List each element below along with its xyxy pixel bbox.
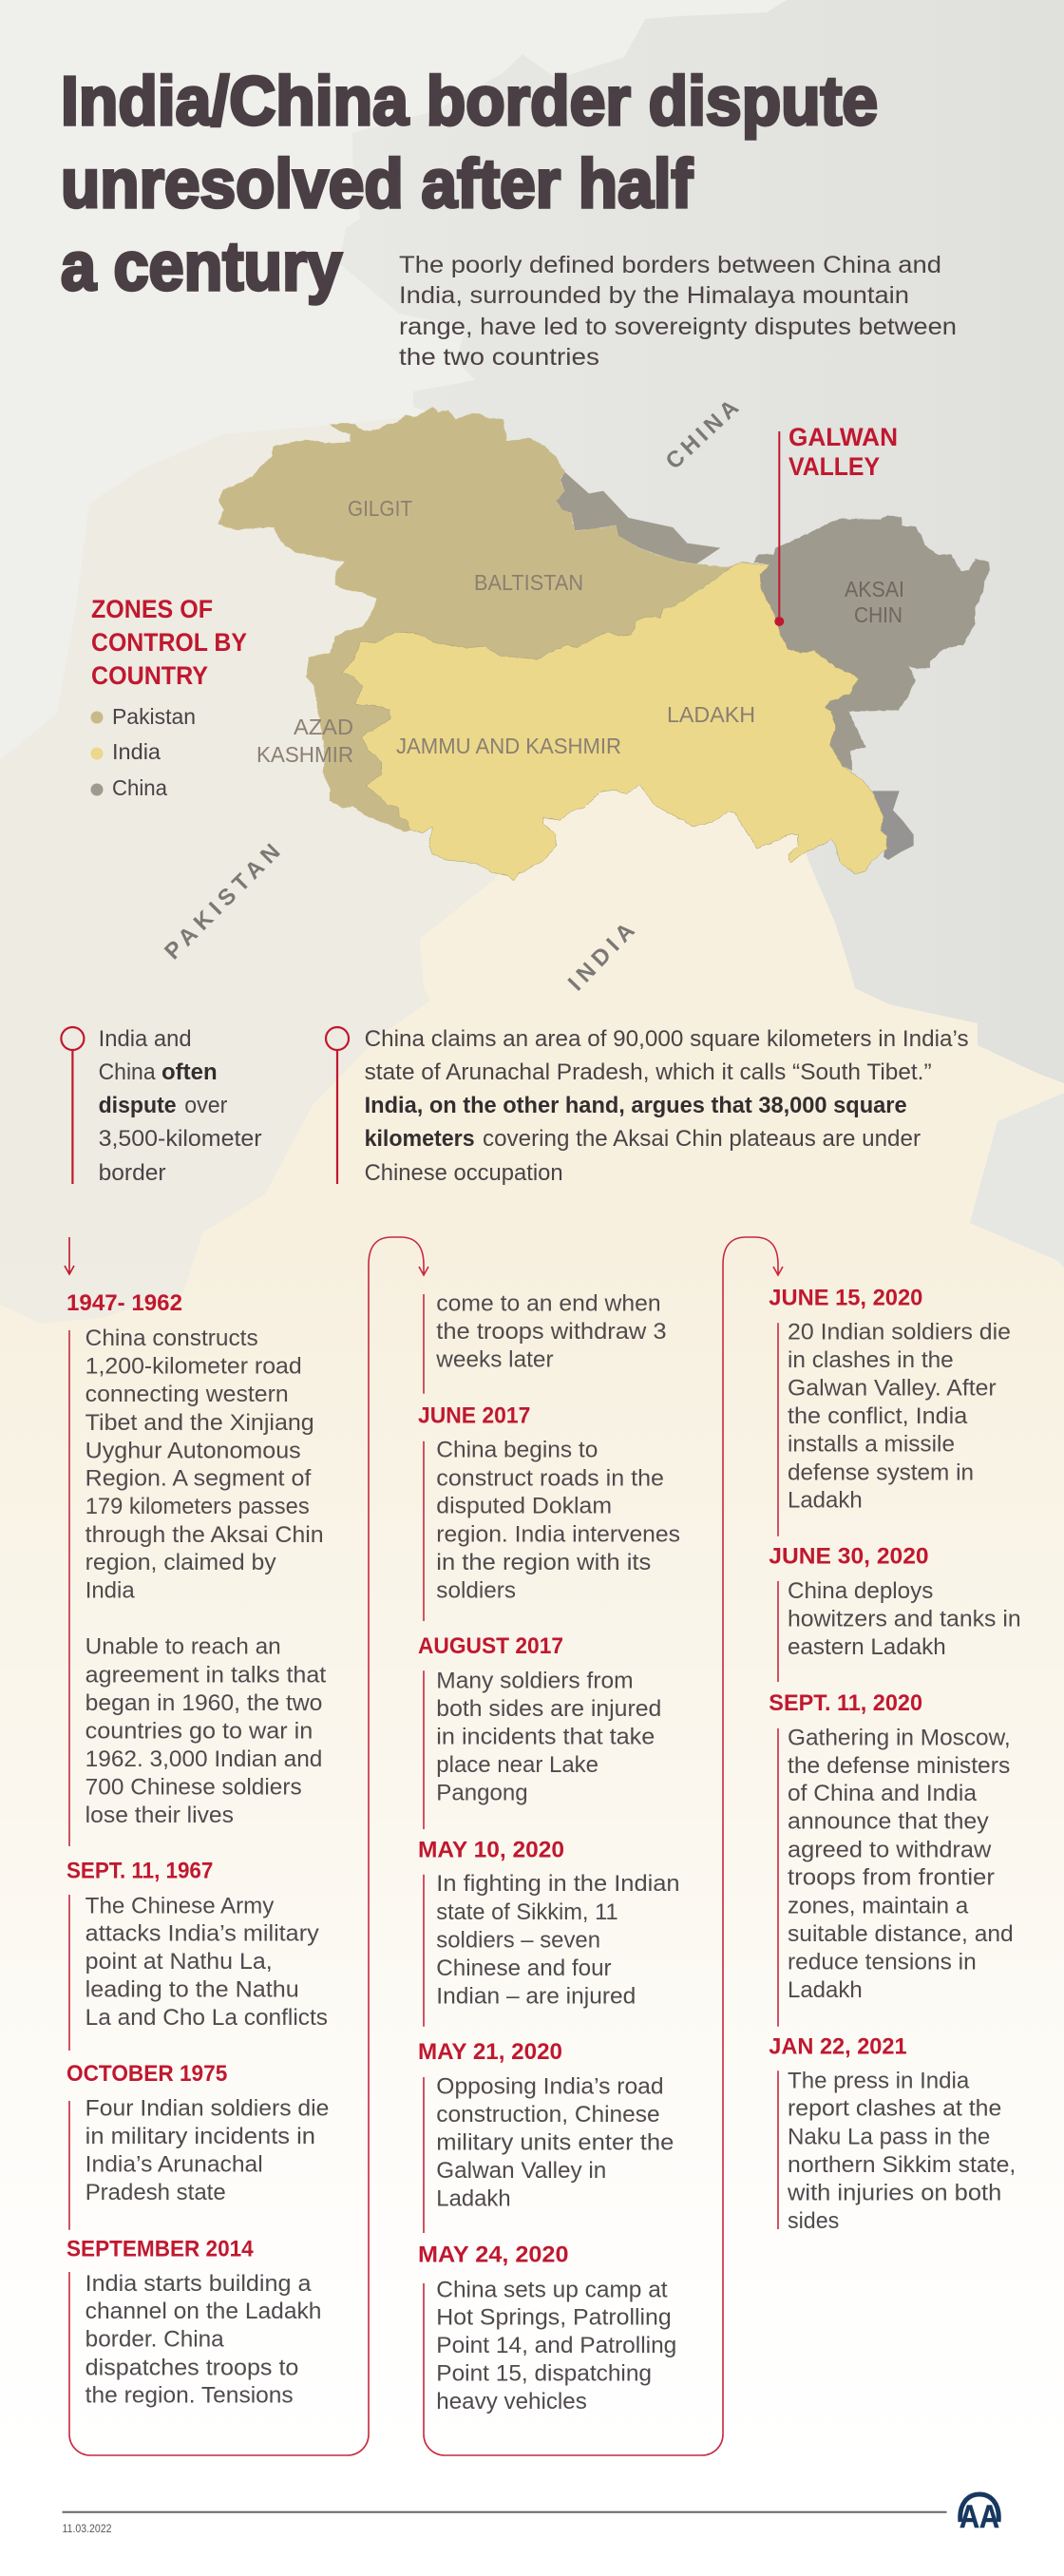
entry text: Ladakh [788,1488,863,1514]
legend heading [91,595,247,690]
entry text: channel on the Ladakh [86,2299,321,2324]
entry text: the conflict, India [788,1403,968,1429]
entry text: 1962. 3,000 Indian and [86,1746,322,1772]
entry text: China deploys [788,1578,933,1604]
entry text: defense system in [788,1460,974,1485]
timeline entry: June 15, 2020 [769,1285,1011,1536]
entry text: Region. A segment of [86,1466,312,1492]
icon: Anadolu Agency logo: AA [960,2499,999,2535]
country label: Pakistan: PAKISTAN [160,839,285,964]
country label: China: CHINA [661,395,744,474]
fact block: 3,500-kilometer border: often [162,1059,218,1085]
date heading: MAY 21, 2020 [418,2039,562,2065]
entry text: connecting western [86,1382,289,1407]
entry text: Pangong [436,1780,528,1805]
legend item: India [91,739,161,764]
entry text: Uyghur Autonomous [86,1438,301,1463]
timeline entry: 1947-1962 [66,1290,327,1846]
title: unresolved after half [61,146,694,222]
entry text: La and Cho La conflicts [86,2005,328,2031]
entry text [436,1438,680,1603]
entry text [788,1725,1014,2003]
fact block: 3,500-kilometer border: border [99,1160,166,1186]
timeline entry: June 30, 2020 [769,1544,1021,1682]
entry text: state of Sikkim, 11 [436,1899,618,1925]
legend: zones of control by country [91,595,247,800]
entry text: India starts building a [86,2271,312,2297]
map label: Gilgit: GILGIT [348,496,412,521]
entry text: Point 14, and Patrolling [436,2333,676,2358]
entry text: 20 Indian soldiers die [788,1319,1011,1345]
callout: Galwan Valley marker [774,423,898,626]
callout: Galwan Valley marker: GALWAN [788,423,898,451]
intro text: the two countries [399,344,599,371]
date stamp: 11.03.2022 [63,2522,112,2535]
title [61,64,878,305]
timeline entry: May 10, 2020 [418,1837,680,2027]
entry text: point at Nathu La, [86,1949,273,1975]
entry text [436,2277,676,2414]
entry text: region, claimed by [86,1550,276,1575]
entry text: weeks later [435,1346,554,1372]
entry text: region. India intervenes [436,1521,680,1547]
entry text: of China and India [788,1781,978,1806]
entry text: through the Aksai Chin [86,1522,324,1548]
entry text: Opposing India’s road [436,2073,664,2099]
entry text: both sides are injured [436,1696,661,1722]
entry text: soldiers [436,1577,516,1603]
entry text: agreement in talks that [86,1662,327,1688]
entry text: border. China [86,2327,224,2353]
map label: Aksai Chin: CHIN [854,602,902,627]
title: a century [61,229,342,305]
country label: India: INDIA [563,918,639,996]
entry text: dispatches troops to [86,2355,298,2380]
title: India/China border dispute [61,64,878,140]
fact block: territorial claims: covering the Aksai Chin plateaus are under [483,1126,921,1152]
entry text: Naku La pass in the [788,2124,990,2149]
map label: Baltistan: BALTISTAN [474,570,583,595]
timeline entry: September 2014 [66,2236,321,2409]
entry text: reduce tensions in [788,1949,977,1975]
timeline entry: Jan 22, 2021 [769,2033,1016,2234]
entry text [86,1326,327,1828]
entry text: suitable distance, and [788,1921,1014,1947]
entry text: heavy vehicles [436,2389,587,2414]
fact block: territorial claims [326,1026,969,1186]
map label: Ladakh: LADAKH [667,702,755,727]
entry text: Tibet and the Xinjiang [86,1410,314,1436]
date heading: AUGUST 2017 [418,1633,563,1659]
entry text: Ladakh [788,1977,863,2003]
legend heading: ZONES OF [91,595,213,623]
entry text: in incidents that take [436,1725,655,1750]
entry text: China sets up camp at [436,2277,668,2302]
entry text [86,2271,321,2409]
entry text: lose their lives [86,1803,234,1828]
map label: Azad Kashmir [256,715,353,767]
entry text: leading to the Nathu [86,1977,299,2003]
entry text: the defense ministers [788,1753,1010,1779]
date heading: JUNE 15, 2020 [769,1285,922,1310]
entry text: come to an end when [436,1290,661,1316]
intro text: range, have led to sovereignty disputes between [399,314,957,340]
date heading: SEPT. 11, 1967 [66,1859,213,1884]
map of disputed zones [160,395,991,996]
fact block: territorial claims: Chinese occupation [365,1160,563,1186]
fact block: territorial claims: state of Arunachal Pradesh, which it calls “South Tibet.” [365,1059,932,1085]
entry text: the troops withdraw 3 [436,1319,667,1345]
timeline entry: May 21, 2020 [418,2039,674,2233]
entry text [788,1319,1011,1514]
entry text: The Chinese Army [86,1893,274,1918]
fact block: 3,500-kilometer border: India and [99,1026,192,1052]
entry text: Unable to reach an [86,1634,281,1660]
entry text: Four Indian soldiers die [86,2096,329,2122]
zone: Pakistan [218,407,741,832]
date heading: 1947- 1962 [66,1290,182,1316]
entry text: in the region with its [436,1550,651,1575]
entry text: place near Lake [436,1752,598,1778]
entry text: installs a missile [788,1432,955,1458]
date heading: SEPT. 11, 2020 [769,1690,922,1716]
entry text: attacks India’s military [86,1921,319,1947]
date heading: JUNE 30, 2020 [769,1544,929,1570]
entry text [787,2068,1016,2234]
entry text: 1,200-kilometer road [86,1354,302,1380]
timeline entry: Sept. 11, 1967 [66,1859,328,2051]
timeline entry: September 2014 continued [424,1290,667,1394]
entry text: sides [788,2208,839,2234]
entry text: began in 1960, the two [86,1690,322,1716]
entry text [436,1669,661,1805]
intro text [399,252,957,371]
entry text [86,1893,328,2031]
entry text: The press in India [788,2068,970,2093]
fact block: 3,500-kilometer border: dispute [99,1093,177,1118]
entry text: Pradesh state [86,2180,226,2205]
fact block: 3,500-kilometer border [61,1026,262,1186]
map label: Aksai Chin: AKSAI [845,577,904,601]
footer [63,2494,999,2535]
entry text [86,2096,329,2205]
entry text: India [86,1578,135,1604]
entry text: Galwan Valley in [436,2158,606,2184]
entry text: construct roads in the [436,1465,664,1491]
entry text: in military incidents in [86,2124,315,2149]
date heading: OCTOBER 1975 [66,2061,227,2087]
intro text: The poorly defined borders between China and [399,252,941,278]
entry text: China begins to [436,1438,598,1463]
zone: China, Aksai Chin [753,516,991,772]
entry text: Ladakh [436,2186,511,2212]
fact block: 3,500-kilometer border: over [184,1093,227,1118]
entry text: 700 Chinese soldiers [86,1774,302,1800]
map label: Azad Kashmir: AZAD [294,715,353,739]
entry text: Hot Springs, Patrolling [436,2305,672,2331]
entry text: northern Sikkim state, [788,2152,1016,2178]
entry text: report clashes at the [788,2096,1001,2122]
entry text: troops from frontier [788,1865,995,1891]
entry text: countries go to war in [86,1718,313,1745]
fact block: territorial claims: India, on the other hand, argues that 38,000 square [365,1093,907,1118]
intro text: India, surrounded by the Himalaya mountain [399,282,909,309]
entry text: with injuries on both [787,2180,1001,2205]
fact block: 3,500-kilometer border: 3,500-kilometer [99,1126,262,1152]
entry text: China constructs [86,1326,258,1351]
entry text: howitzers and tanks in [788,1607,1021,1632]
entry text: 179 kilometers passes [86,1494,310,1519]
entry text: announce that they [788,1809,989,1835]
legend heading: CONTROL BY [91,628,247,657]
date heading: SEPTEMBER 2014 [66,2236,254,2261]
entry text: disputed Doklam [436,1494,612,1519]
date heading: JAN 22, 2021 [769,2033,907,2059]
entry text: soldiers – seven [436,1927,600,1953]
entry text: eastern Ladakh [788,1634,946,1660]
entry text: India’s Arunachal [86,2152,263,2178]
entry text: in clashes in the [788,1347,954,1373]
entry text [436,1871,680,2009]
zone: India [342,563,886,881]
date heading: JUNE 2017 [418,1402,530,1428]
legend heading: COUNTRY [91,661,208,690]
entry text: agreed to withdraw [788,1837,992,1862]
fact block: territorial claims: kilometers [365,1126,475,1152]
date heading: MAY 24, 2020 [418,2242,568,2268]
entry text: Galwan Valley. After [788,1375,997,1401]
fact block: territorial claims: China claims an area of 90,000 square kilometers in India’s [365,1026,969,1052]
timeline entry: June 2017 [418,1402,680,1621]
legend item: Pakistan: Pakistan [112,704,196,729]
entry text: Indian – are injured [436,1983,636,2009]
map label: Jammu and Kashmir: JAMMU AND KASHMIR [396,734,621,758]
entry text [436,2073,674,2212]
timeline entry: May 24, 2020 [418,2242,676,2414]
date heading: MAY 10, 2020 [418,1837,564,1862]
entry text: construction, Chinese [436,2102,660,2128]
map label: Aksai Chin [845,577,904,627]
timeline entry: October 1975 [66,2061,329,2230]
timeline entry: Sept. 11, 2020 [769,1690,1014,2027]
arrow: timeline connector from column one to column two [69,1237,428,2455]
zone: China, northern strip [556,472,720,563]
arrow: start of timeline [65,1237,74,1274]
fact block: 3,500-kilometer border: China [99,1059,156,1085]
entry text [435,1290,667,1372]
entry text: military units enter the [436,2130,674,2156]
map label: Azad Kashmir: KASHMIR [256,742,353,767]
arrow: timeline connector from column two to column three [424,1237,783,2455]
zone: China, eastern tip [872,791,914,860]
legend item: China: China [112,775,167,800]
entry text [788,1578,1021,1660]
entry text: zones, maintain a [788,1893,969,1918]
entry text: Many soldiers from [436,1669,634,1694]
entry text: Gathering in Moscow, [788,1725,1011,1750]
timeline entry: August 2017 [418,1633,661,1829]
callout: Galwan Valley marker: VALLEY [788,452,880,481]
entry text: the region. Tensions [86,2383,294,2409]
legend item: India: India [112,739,161,764]
entry text: Chinese and four [436,1956,612,1981]
entry text: In fighting in the Indian [436,1871,680,1897]
entry text: Point 15, dispatching [436,2361,652,2387]
